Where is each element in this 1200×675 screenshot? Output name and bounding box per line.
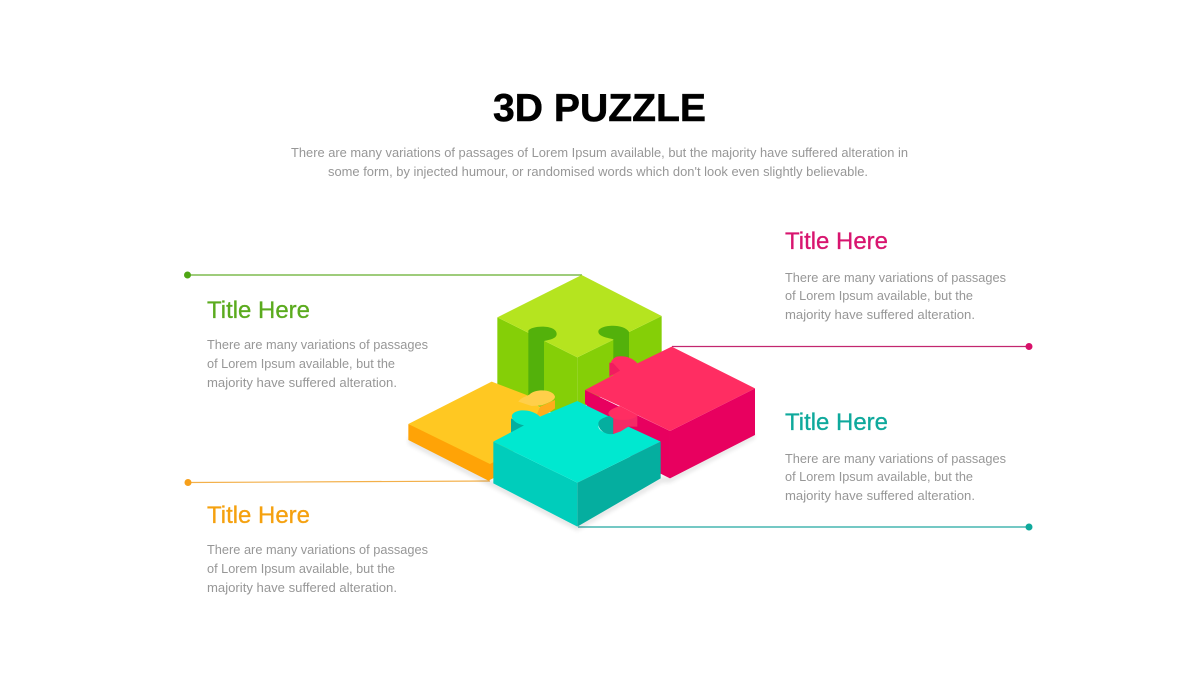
puzzle piece: pink <box>585 347 755 478</box>
callout: teal: of Lorem Ipsum available, but the <box>785 469 973 484</box>
callout: teal: There are many variations of passages <box>785 451 1006 466</box>
connector: pink <box>672 343 1032 350</box>
subtitle text: There are many variations of passages of Lorem Ipsum available, but the majority have suffered alteration in <box>291 145 908 160</box>
puzzle piece: yellow <box>408 382 560 481</box>
callout: green <box>207 297 428 390</box>
connector: green <box>184 272 582 278</box>
callout: green: majority have suffered alteration. <box>207 375 397 390</box>
callout: orange: majority have suffered alteration. <box>207 580 397 595</box>
puzzle piece: teal <box>493 401 661 527</box>
callout: pink: of Lorem Ipsum available, but the <box>785 288 973 303</box>
callout: teal <box>785 409 1006 503</box>
callout: teal: majority have suffered alteration. <box>785 488 975 503</box>
pink tab over teal <box>608 406 637 434</box>
3D puzzle illustration <box>408 275 755 531</box>
callout: orange <box>207 502 428 595</box>
callout: teal: Title Here <box>785 409 888 436</box>
callout: orange: of Lorem Ipsum available, but the <box>207 561 395 576</box>
connector: orange <box>184 479 490 486</box>
callout: pink: Title Here <box>785 228 888 255</box>
callout: pink: majority have suffered alteration. <box>785 307 975 322</box>
shadow <box>408 433 755 531</box>
callout: pink: There are many variations of passages <box>785 270 1006 285</box>
title: 3D PUZZLE <box>493 87 706 130</box>
puzzle piece: green <box>497 275 662 417</box>
callout: green: of Lorem Ipsum available, but the <box>207 356 395 371</box>
subtitle text: some form, by injected humour, or randomised words which don't look even slightly believable. <box>328 164 868 179</box>
callout: orange: Title Here <box>207 502 310 529</box>
callout: green: Title Here <box>207 297 310 324</box>
callout: orange: There are many variations of passages <box>207 542 428 557</box>
subtitle text <box>291 145 908 179</box>
callout: pink <box>785 228 1006 322</box>
callout: green: There are many variations of passages <box>207 337 428 352</box>
connector: teal <box>578 524 1032 530</box>
